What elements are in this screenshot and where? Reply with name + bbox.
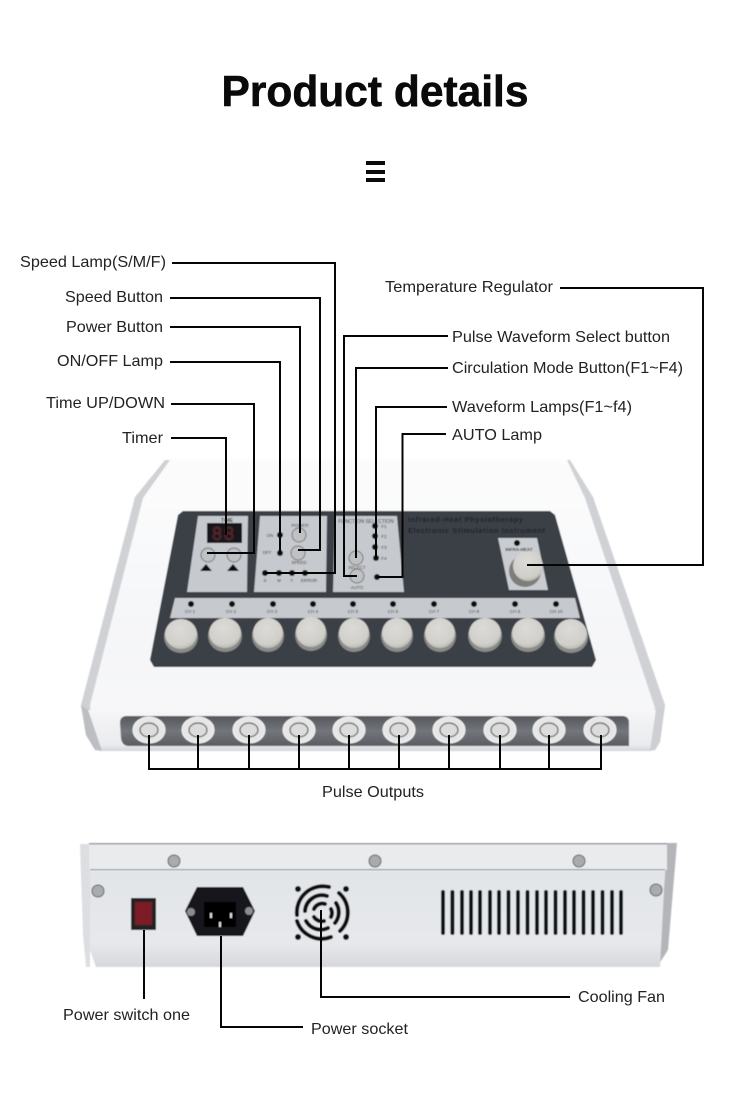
callout labels: Power Button (66, 319, 163, 336)
cooling fan vent (295, 886, 349, 940)
channel strip: CH 5 (348, 609, 359, 614)
channel knobs (164, 617, 588, 653)
channel strip (170, 598, 580, 618)
channel strip: CH 1 (185, 609, 196, 614)
channel strip: CH 10 (550, 609, 563, 614)
channel strip: CH 6 (388, 609, 399, 614)
power switch (131, 898, 156, 930)
power and speed panel: ERROR (301, 578, 318, 583)
power and speed panel: POWER (291, 523, 309, 528)
output port bar (120, 716, 629, 746)
power socket (185, 887, 255, 936)
callout labels: Circulation Mode Button(F1~F4) (452, 360, 683, 377)
time panel: TIME (221, 518, 234, 524)
channel strip: CH 8 (469, 609, 480, 614)
callout labels: Speed Button (65, 289, 163, 306)
power and speed panel (254, 516, 327, 592)
function selection panel: F3 (381, 545, 387, 550)
device body (81, 460, 665, 751)
channel strip: CH 2 (226, 609, 237, 614)
callout labels: Waveform Lamps(F1~f4) (452, 399, 632, 416)
panel heading (408, 515, 546, 535)
channel strip: CH 3 (267, 609, 278, 614)
callout labels: Pulse Outputs (322, 784, 424, 801)
callout labels (20, 254, 683, 1038)
front device: main unit (81, 460, 665, 751)
title: Product details (222, 67, 528, 116)
time panel: 88 (212, 524, 236, 544)
power and speed panel: OFF (262, 550, 272, 555)
channel strip: CH 9 (510, 609, 521, 614)
callout labels: AUTO Lamp (452, 427, 542, 444)
callout labels: ON/OFF Lamp (57, 353, 163, 370)
callout labels: Time UP/DOWN (46, 395, 165, 412)
power and speed panel: M (277, 578, 281, 583)
callout labels: Cooling Fan (578, 989, 665, 1006)
function selection panel: F2 (381, 534, 387, 539)
callout labels: Temperature Regulator (385, 279, 554, 296)
callout lines (144, 263, 703, 1027)
power and speed panel: SPEED (291, 560, 307, 565)
callout labels: Timer (122, 430, 164, 447)
callout labels: Power socket (311, 1021, 409, 1038)
function selection panel: AUTO (351, 585, 364, 590)
rear device (80, 843, 677, 967)
function selection panel: F4 (381, 556, 387, 561)
function selection panel: FUNCTION SELECTION (338, 519, 394, 525)
power and speed panel: ON (267, 533, 273, 538)
icon: three-bar menu (366, 161, 385, 182)
channel strip: CH 4 (308, 609, 319, 614)
callout labels: Pulse Waveform Select button (452, 329, 670, 346)
callout labels: Speed Lamp(S/M/F) (20, 254, 166, 271)
callout labels: Power switch one (63, 1007, 190, 1024)
function selection panel (333, 516, 404, 592)
rear body (80, 843, 677, 967)
function selection panel: SELECT (348, 565, 366, 570)
rear vent slots (443, 892, 621, 933)
screws (92, 855, 662, 897)
power and speed panel: S (263, 578, 267, 583)
temperature panel: INFRA-HEAT (505, 547, 533, 552)
channel strip: CH 7 (429, 609, 440, 614)
temperature panel (498, 538, 548, 590)
function selection panel: F1 (381, 524, 387, 529)
control panel (150, 511, 596, 667)
time panel (187, 516, 248, 592)
power and speed panel: F (291, 578, 294, 583)
panel heading: Infrared-Heat Physiotherapy (408, 515, 524, 524)
panel heading: Electronic Stimulation Instrument (408, 526, 546, 535)
